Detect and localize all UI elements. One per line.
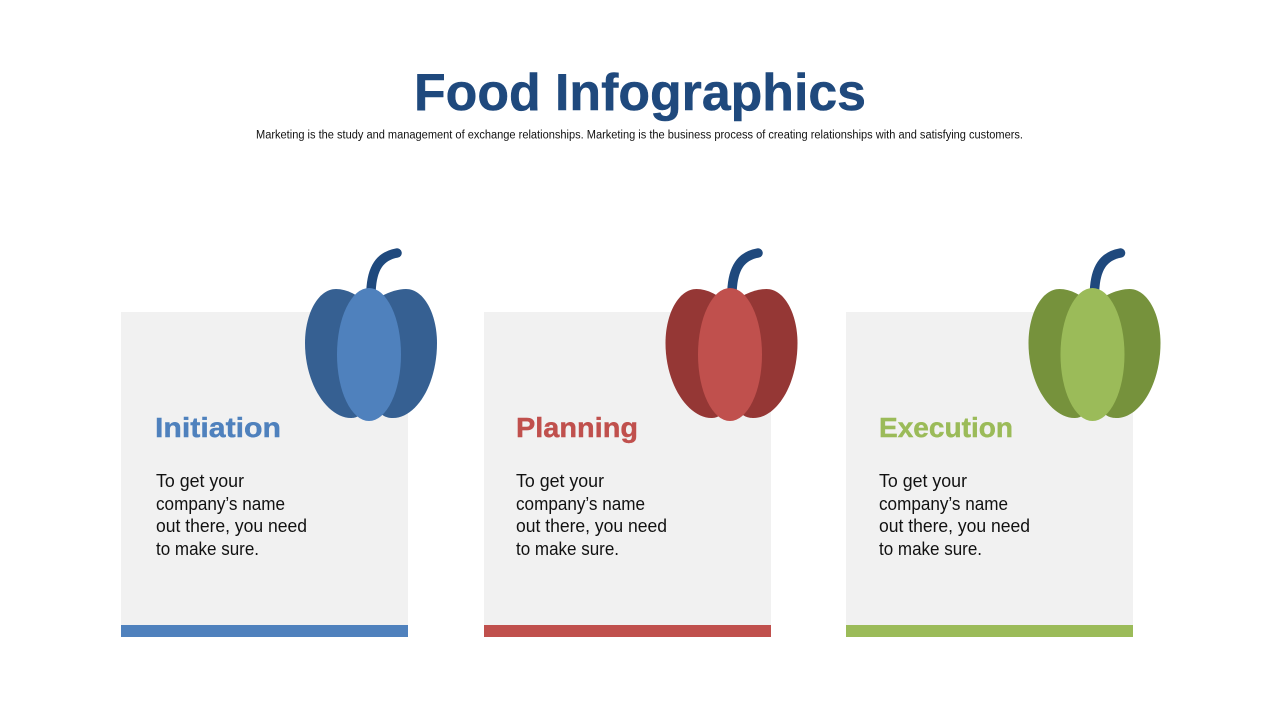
card background xyxy=(121,312,408,637)
card background xyxy=(484,312,771,637)
heading: Planning xyxy=(516,412,638,443)
card background xyxy=(846,312,1133,637)
body text xyxy=(879,471,1030,559)
body text: to make sure. xyxy=(516,539,619,559)
subtitle: Marketing is the study and management of exchange relationships. Marketing is the business process of creating relationships with and satisfying customers. xyxy=(256,130,1023,142)
accent bar xyxy=(484,625,771,637)
body text: To get your xyxy=(516,471,604,491)
accent bar xyxy=(121,625,408,637)
body text: company’s name xyxy=(156,494,285,514)
body text xyxy=(156,471,307,559)
heading: Initiation xyxy=(155,412,281,443)
accent bar xyxy=(846,625,1133,637)
body text xyxy=(516,471,667,559)
body text: out there, you need xyxy=(516,516,667,536)
body text: company’s name xyxy=(879,494,1008,514)
heading: Execution xyxy=(879,412,1013,443)
title: Food Infographics xyxy=(414,64,866,122)
body text: company’s name xyxy=(516,494,645,514)
body text: out there, you need xyxy=(156,516,307,536)
body text: To get your xyxy=(879,471,967,491)
body text: to make sure. xyxy=(156,539,259,559)
body text: to make sure. xyxy=(879,539,982,559)
icon: green pepper xyxy=(1028,253,1160,421)
icon: blue pepper xyxy=(305,253,437,421)
panel: execution xyxy=(846,253,1160,637)
body text: out there, you need xyxy=(879,516,1030,536)
panel: initiation xyxy=(121,253,437,637)
panel: planning xyxy=(484,253,798,637)
body text: To get your xyxy=(156,471,244,491)
icon: red pepper xyxy=(666,253,798,421)
